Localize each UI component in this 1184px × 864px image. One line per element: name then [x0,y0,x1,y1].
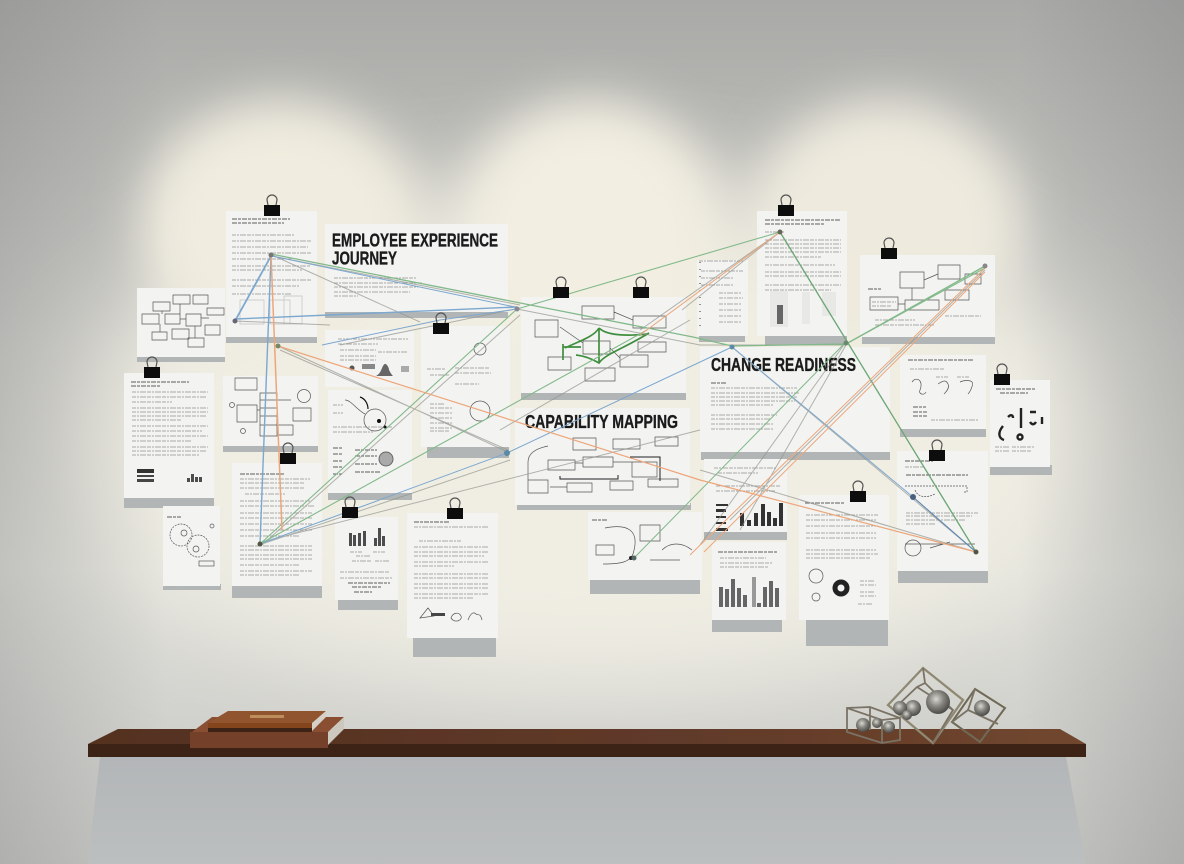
paper: notes with circular sketch [421,326,510,447]
paper: lower bar chart [712,542,786,620]
paper: mid bar chart [704,459,787,532]
paper: narrow list [697,260,748,336]
binder clips [144,195,1010,519]
shadows cast by the papers [124,310,1052,657]
paper: right clip sheet [990,380,1050,467]
paper: long text lower middle [407,513,498,638]
paper: donut chart sheet [799,495,889,620]
panel: capability mapping [515,408,690,505]
paper: venn sketch [163,506,220,586]
paper: ladder diagram [223,376,318,446]
heading: change readiness: CHANGE READINESS [711,354,856,375]
strings: orange [271,232,985,555]
paper: small bar sheet [335,517,398,600]
books on shelf [190,711,344,748]
paper: right sketch document [897,451,988,571]
strings: blue [235,256,976,552]
bar chart: seven bars [740,503,783,526]
paper: flow diagram [137,288,225,357]
strings: green [260,232,985,558]
paper: long text lower left [232,463,322,586]
paper: hand sketch wide [588,512,702,580]
panel: change readiness [700,347,890,452]
bar chart: ten bars [719,577,779,607]
paper: green network diagram [521,297,686,393]
paper: left document [124,373,214,498]
paper: upper charts sheet [325,330,414,387]
panel: employee experience journey [325,224,508,312]
paper: mixed sketches [328,390,412,493]
shelf [88,729,1086,757]
paper: top-left document [226,211,317,337]
sculpture: metal cubes with spheres [847,668,1005,743]
heading: capability mapping: CAPABILITY MAPPING [525,411,678,432]
heading: employee experience journey: EMPLOYEE EXPERIENCE [332,230,498,250]
heading: employee experience journey: JOURNEY [332,248,397,268]
paper: top right diagram [860,255,995,337]
paper: top centre document [757,211,847,336]
paper: three sketches [900,355,986,429]
donut chart [835,582,847,594]
string pins [232,230,988,560]
gray strings [235,232,985,552]
